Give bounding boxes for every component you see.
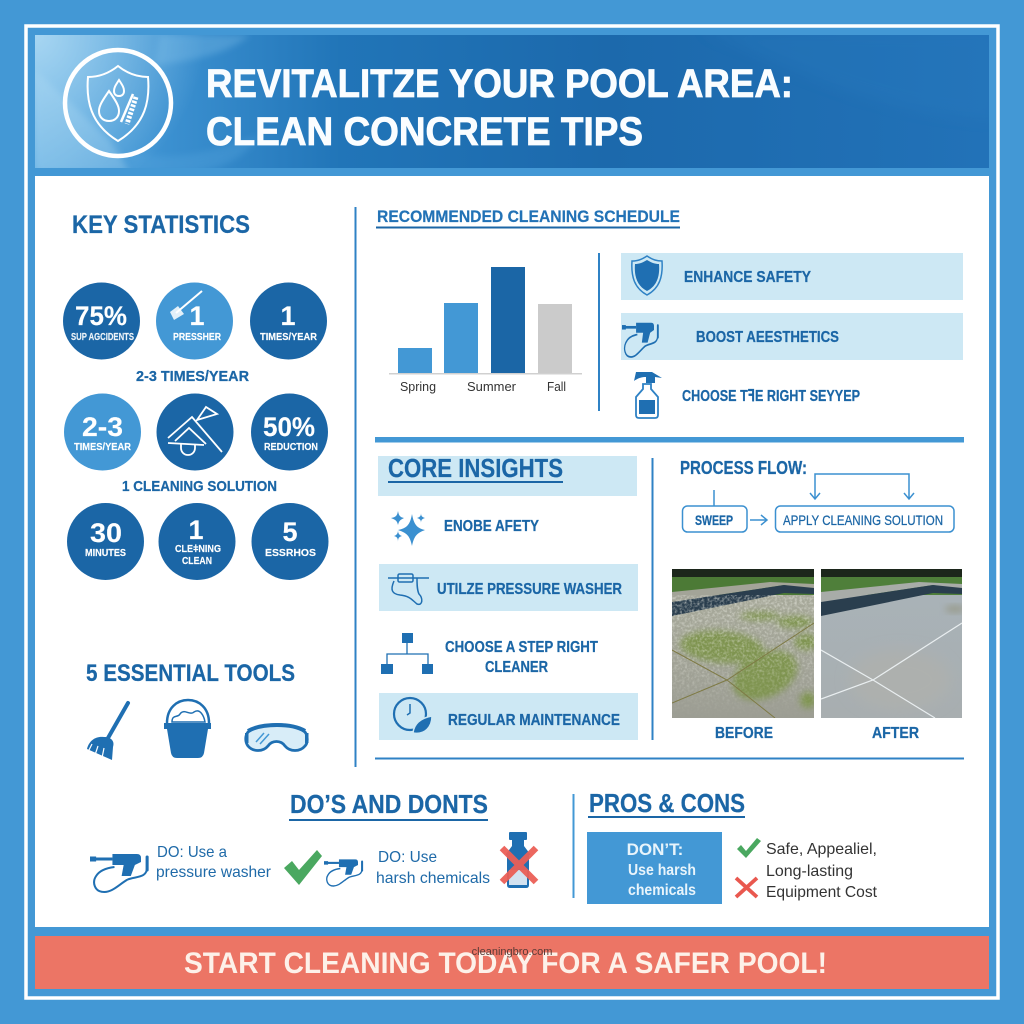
header icon: shield with drops and brush — [65, 50, 171, 156]
stat: 1 pressher with broom: PRESSHER — [173, 331, 221, 343]
cons text: Equipment Cost — [766, 884, 878, 901]
panel: regular maintenance — [379, 693, 638, 740]
don't box: chemicals — [628, 882, 696, 899]
stat: 1 pressher with broom — [156, 282, 233, 360]
panel: core insights heading — [378, 453, 637, 496]
photo: after — [821, 569, 965, 718]
icon: con cross — [736, 878, 757, 897]
do's and don'ts section — [90, 789, 536, 892]
panel: boost aesthetics: BOOST AEESTHETICS — [696, 329, 839, 346]
panel: enhance safety: ENHANCE SAFETY — [684, 269, 811, 286]
icon: safety goggles — [245, 724, 308, 750]
stat: 50% reduction: REDUCTION — [264, 441, 318, 453]
stat: 1 cleaning clean: CLEAN — [182, 555, 212, 567]
do text: use harsh chemicals: DO: Use — [378, 849, 437, 866]
icon: green check — [284, 850, 322, 885]
after label: AFTER — [872, 725, 919, 742]
stat: 75% slip accidents: SUP AGCIDENTS — [71, 331, 134, 343]
icon: pressure washer large — [90, 854, 147, 892]
call to action banner — [35, 936, 989, 989]
row: choose a step right cleaner — [381, 633, 598, 676]
pros and cons section — [587, 788, 878, 904]
icon: pro check — [737, 838, 761, 858]
icon: shield — [632, 256, 662, 295]
icon: clock and leaf — [394, 698, 432, 733]
stat: 1 pressher with broom: 1 — [189, 301, 205, 331]
don't box: Use harsh — [628, 862, 696, 879]
title: CLEAN CONCRETE TIPS — [206, 110, 643, 154]
icon: sparkles — [391, 511, 425, 546]
arrow: bracket loop — [810, 474, 914, 499]
do text: use a pressure washer — [156, 844, 272, 881]
do text: use a pressure washer: DO: Use a — [157, 844, 227, 861]
bar chart: cleaning schedule: Spring — [400, 379, 436, 394]
stat: 75% slip accidents: 75% — [75, 301, 127, 331]
process heading: PROCESS FLOW: — [680, 458, 807, 478]
step: sweep: SWEEP — [695, 512, 733, 528]
do text: use harsh chemicals: harsh chemicals — [376, 870, 490, 887]
stat: 2-3 times per year: TIMES/YEAR — [74, 441, 131, 453]
pros text: Long-lasting — [766, 863, 853, 880]
stat: 5 essentials — [252, 503, 328, 580]
step: sweep — [682, 506, 747, 532]
line above sweep — [713, 490, 715, 506]
title: REVITALITZE YOUR POOL AREA: — [206, 62, 793, 106]
bar chart: cleaning schedule — [389, 267, 582, 394]
row: choose the right step — [634, 372, 860, 418]
stat: 5 essentials: 5 — [282, 517, 298, 547]
white content panel — [35, 176, 989, 927]
dos heading: DO’S AND DONTS — [290, 789, 488, 819]
don't box — [587, 832, 722, 904]
stat: 1 cleaning clean: 1 — [188, 515, 204, 545]
row: enable safety — [391, 511, 540, 546]
pros text: Safe, Appealiel, — [766, 841, 877, 858]
bar chart: cleaning schedule: Fall — [547, 379, 566, 394]
icon: crossed chemical bottle — [502, 832, 536, 888]
icon: broom — [87, 703, 128, 760]
stat: 1 cleaning clean: CLEǂNING — [175, 543, 221, 555]
process flow — [680, 458, 954, 532]
step: apply cleaning solution: APPLY CLEANING SOLUTION — [783, 512, 943, 528]
icon: pressure washer — [622, 323, 658, 357]
arrow: sweep to apply — [750, 515, 767, 525]
schedule heading: RECOMMENDED CLEANING SCHEDULE — [377, 207, 680, 226]
icon: pressure washer outline — [388, 574, 429, 604]
row: choose the right step: CHOOSE TꟻE RIGHT SEYYEP — [682, 388, 860, 405]
essential tools section — [86, 660, 308, 760]
icon: hierarchy — [381, 633, 433, 674]
stat: 75% slip accidents — [63, 282, 140, 360]
tools heading: 5 ESSENTIAL TOOLS — [86, 660, 295, 687]
stat: 50% reduction: 50% — [263, 412, 315, 442]
icon: bucket with foam — [164, 700, 211, 758]
pros heading: PROS & CONS — [589, 788, 745, 818]
stat: 1 times per year: 1 — [280, 301, 296, 331]
do text: use harsh chemicals — [376, 849, 490, 887]
icon: pressure washer small — [324, 859, 362, 886]
title — [206, 62, 793, 154]
divider lines — [354, 207, 964, 898]
panel: enhance safety — [621, 253, 963, 300]
panel: boost aesthetics — [621, 313, 963, 360]
stat: 30 minutes: 30 — [90, 518, 122, 548]
row: choose a step right cleaner: CLEANER — [485, 659, 548, 676]
stat: 2-3 times per year — [64, 394, 141, 470]
stat: 30 minutes: MINUTES — [85, 547, 126, 559]
stat circles — [63, 282, 328, 580]
label: 1 cleaning solution: 1 CLEANING SOLUTION — [122, 478, 277, 495]
bar chart: cleaning schedule: Summer — [467, 379, 517, 394]
stat: 50% reduction — [251, 394, 328, 470]
do text: use a pressure washer: pressure washer — [156, 864, 272, 881]
key statistics heading: KEY STATISTICS — [72, 211, 250, 239]
panel: utilize pressure washer: UTILZE PRESSURE WASHER — [437, 581, 622, 598]
stat: 1 times per year — [250, 282, 327, 360]
icon: spray bottle — [634, 372, 662, 418]
label: 2-3 times/year: 2-3 TIMES/YEAR — [136, 368, 249, 385]
don't box: DON’T: — [627, 840, 683, 859]
stat: 5 essentials: ESSRHOS — [265, 547, 316, 559]
stat icon: roof and sprayer — [156, 394, 234, 470]
stat: 1 cleaning clean — [158, 503, 236, 580]
panel: core insights heading: CORE INSIGHTS — [388, 453, 563, 483]
before label: BEFORE — [715, 725, 773, 742]
step: apply cleaning solution — [776, 506, 954, 532]
stat: 1 times per year: TIMES/YEAR — [260, 331, 317, 343]
photo: before — [672, 569, 818, 718]
panel: regular maintenance: REGULAR MAINTENANCE — [448, 712, 620, 729]
panel: utilize pressure washer — [379, 564, 638, 611]
pros text — [766, 841, 877, 880]
stat: 30 minutes — [67, 503, 144, 580]
stat: 2-3 times per year: 2-3 — [82, 412, 123, 442]
call to action banner: START CLEANING TODAY FOR A SAFER POOL! — [184, 947, 827, 980]
row: choose a step right cleaner: CHOOSE A STEP RIGHT — [445, 639, 598, 656]
row: enable safety: ENOBE AFETY — [444, 518, 540, 535]
header banner — [35, 30, 995, 172]
watermark: cleaningbro.com — [472, 946, 552, 958]
